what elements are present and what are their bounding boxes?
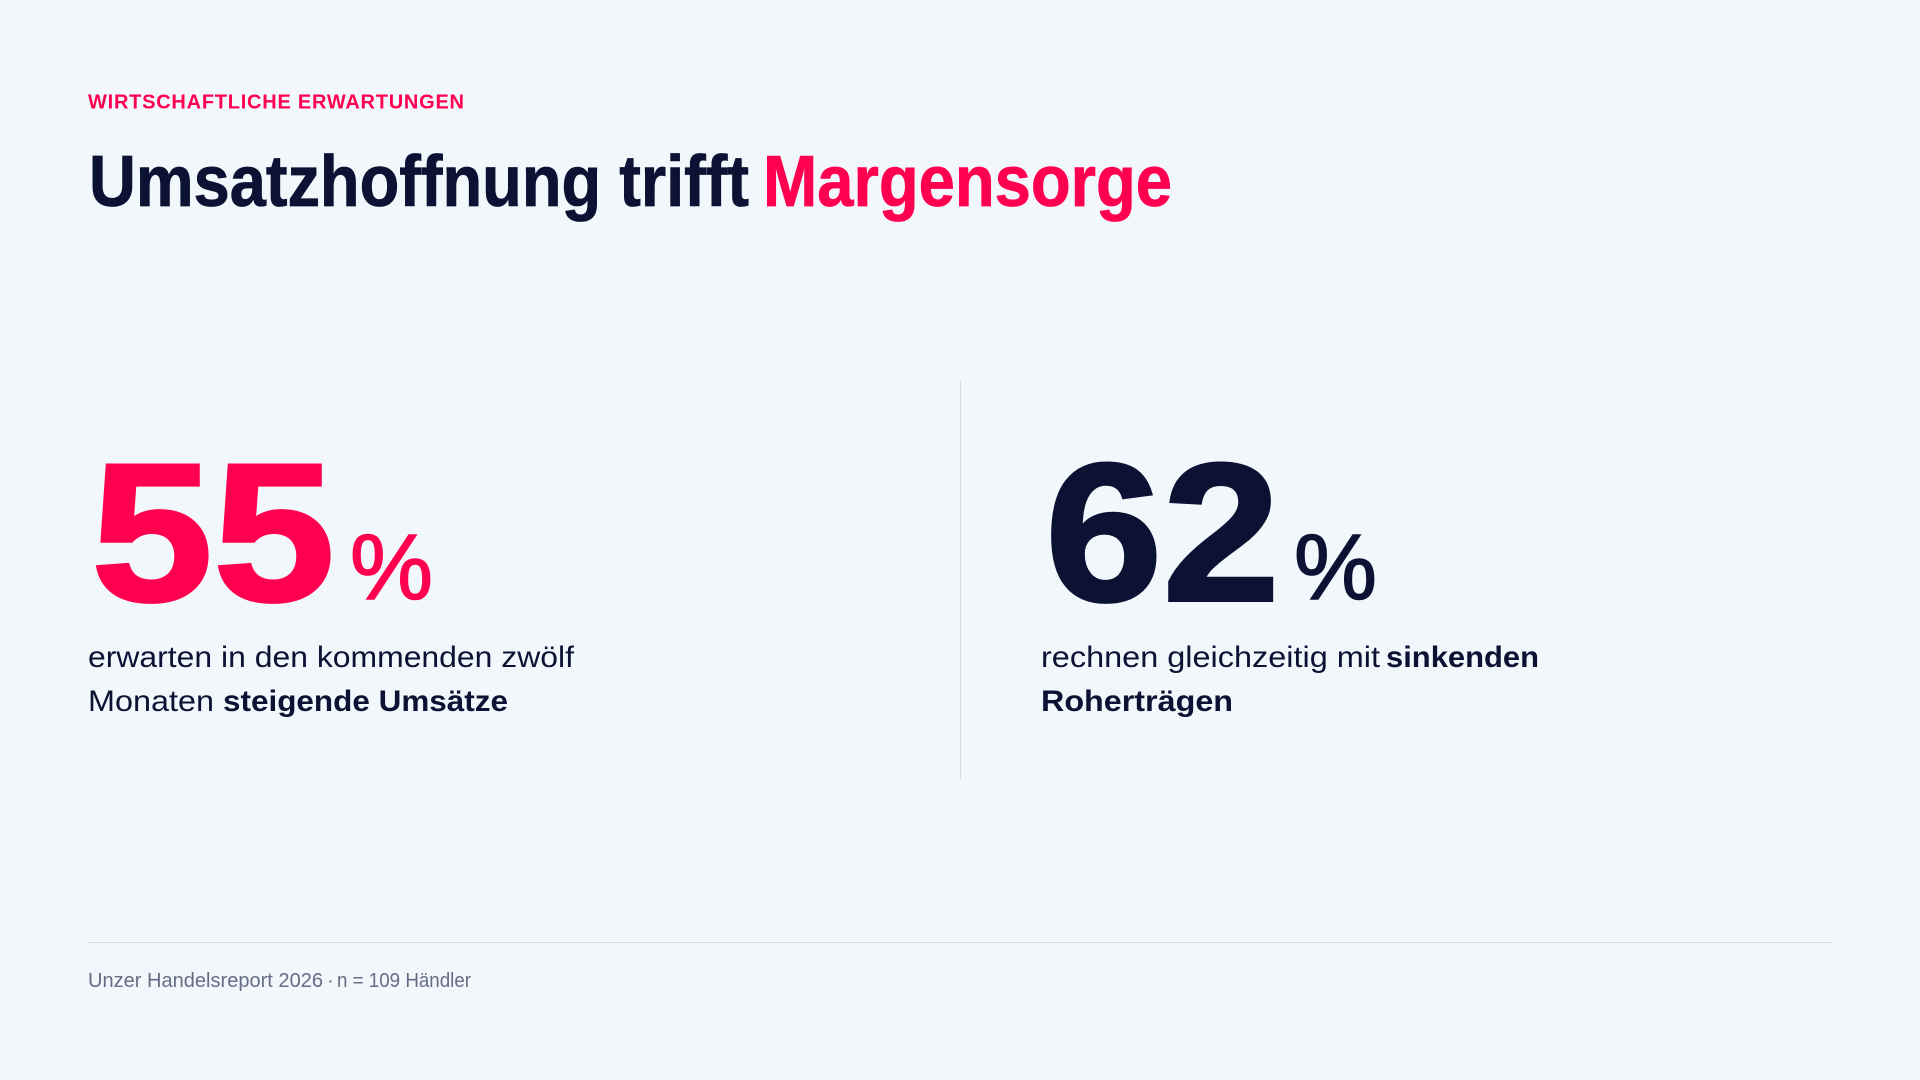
big number 55 percent bbox=[91, 422, 433, 642]
header bbox=[88, 92, 1172, 222]
description: rising revenue bbox=[88, 641, 575, 718]
panel: 55 percent rising revenue bbox=[88, 422, 575, 718]
description: falling gross profit: sinkenden bbox=[1386, 641, 1539, 674]
big number 55 percent: % bbox=[350, 515, 433, 619]
description: falling gross profit: Roherträgen bbox=[1041, 685, 1233, 718]
column divider bbox=[960, 380, 961, 780]
big number 55 percent: 55 bbox=[91, 422, 335, 642]
big number 62 percent: 62 bbox=[1045, 422, 1280, 642]
title: Umsatzhoffnung trifft bbox=[89, 142, 749, 222]
title: Margensorge bbox=[763, 142, 1172, 222]
description: rising revenue: Monaten bbox=[88, 685, 214, 718]
footer rule bbox=[88, 942, 1832, 943]
big number 62 percent: % bbox=[1294, 515, 1377, 619]
description: rising revenue: erwarten in den kommenden zwölf bbox=[88, 641, 575, 674]
source note: n = 109 Händler bbox=[337, 969, 471, 992]
panel: 62 percent falling gross profit bbox=[1041, 422, 1539, 718]
title bbox=[89, 142, 1172, 222]
big number 62 percent bbox=[1045, 422, 1377, 642]
description: falling gross profit: rechnen gleichzeitig mit bbox=[1041, 641, 1381, 674]
source note: · bbox=[327, 969, 334, 992]
source note bbox=[88, 969, 471, 992]
source note: Unzer Handelsreport 2026 bbox=[88, 969, 323, 992]
description: falling gross profit bbox=[1041, 641, 1539, 718]
description: rising revenue: steigende Umsätze bbox=[223, 685, 508, 718]
eyebrow label: WIRTSCHAFTLICHE ERWARTUNGEN bbox=[88, 92, 464, 114]
